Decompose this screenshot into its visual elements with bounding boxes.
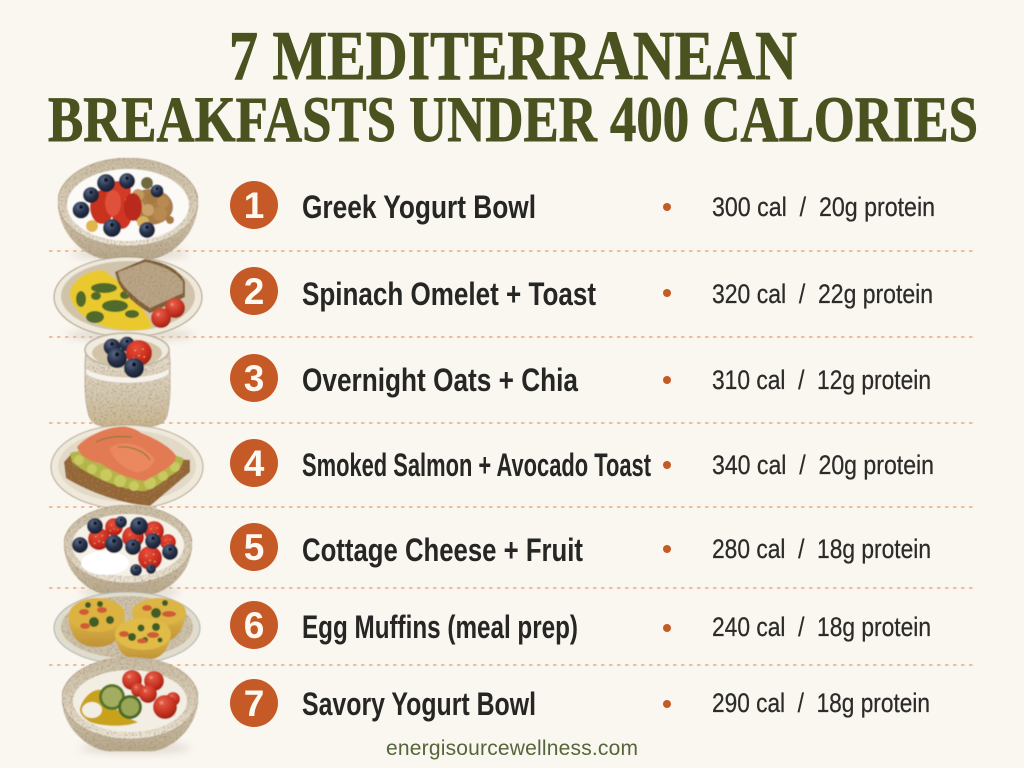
nutrition: 280 cal / 18g protein	[712, 534, 931, 564]
number badge 4	[230, 439, 278, 487]
icon: savory yogurt bowl with cucumber and tomatoes	[62, 657, 198, 754]
bullet	[663, 289, 671, 297]
nutrition: 290 cal / 18g protein	[712, 688, 930, 718]
number badge 6: 6	[244, 605, 264, 646]
panel: row 3 Overnight Oats + Chia	[85, 333, 931, 428]
footer website: energisourcewellness.com	[386, 737, 638, 760]
number badge 5	[230, 523, 278, 571]
bullet	[663, 461, 671, 469]
icon: yogurt bowl with berries and granola	[58, 158, 198, 260]
icon: jar of overnight oats	[85, 333, 170, 428]
panel: row 1 Greek Yogurt Bowl	[58, 158, 935, 260]
title	[48, 18, 978, 156]
nutrition: 340 cal / 20g protein	[712, 450, 934, 480]
icon: cottage cheese bowl with fruit	[64, 505, 192, 598]
panel: row 7 Savory Yogurt Bowl	[62, 657, 930, 754]
number badge 5: 5	[244, 527, 264, 568]
number badge 3	[230, 354, 278, 402]
nutrition: 320 cal / 22g protein	[712, 279, 933, 309]
icon: egg muffins on plate	[54, 592, 200, 664]
title: 7 MEDITERRANEAN	[229, 18, 797, 95]
name: Greek Yogurt Bowl	[302, 189, 536, 225]
number badge 6	[230, 601, 278, 649]
bullet	[663, 624, 671, 632]
nutrition: 240 cal / 18g protein	[712, 612, 931, 642]
bullet	[663, 376, 671, 384]
number badge 3: 3	[244, 358, 264, 399]
icon: salmon avocado toast on plate	[51, 425, 203, 509]
name: Spinach Omelet + Toast	[302, 276, 596, 312]
number badge 1: 1	[244, 185, 264, 226]
number badge 1	[230, 181, 278, 229]
name: Savory Yogurt Bowl	[302, 686, 536, 722]
name: Cottage Cheese + Fruit	[302, 532, 583, 568]
bullet	[663, 545, 671, 553]
name: Overnight Oats + Chia	[302, 362, 578, 398]
nutrition: 310 cal / 12g protein	[712, 365, 931, 395]
panel: row 6 Egg Muffins	[54, 592, 931, 664]
number badge 7	[230, 679, 278, 727]
number badge 7: 7	[244, 683, 264, 724]
panel: row 5 Cottage Cheese + Fruit	[64, 505, 931, 598]
panel: row 2 Spinach Omelet + Toast	[54, 257, 933, 341]
nutrition: 300 cal / 20g protein	[712, 192, 935, 222]
name: Smoked Salmon + Avocado Toast	[302, 447, 651, 483]
panel: row 4 Smoked Salmon + Avocado Toast	[51, 425, 934, 509]
bullet	[663, 203, 671, 211]
number badge 4: 4	[244, 443, 265, 484]
icon: omelet, toast and tomatoes on plate	[54, 257, 202, 341]
number badge 2: 2	[244, 271, 264, 312]
number badge 2	[230, 267, 278, 315]
name: Egg Muffins (meal prep)	[302, 609, 578, 645]
bullet	[663, 700, 671, 708]
